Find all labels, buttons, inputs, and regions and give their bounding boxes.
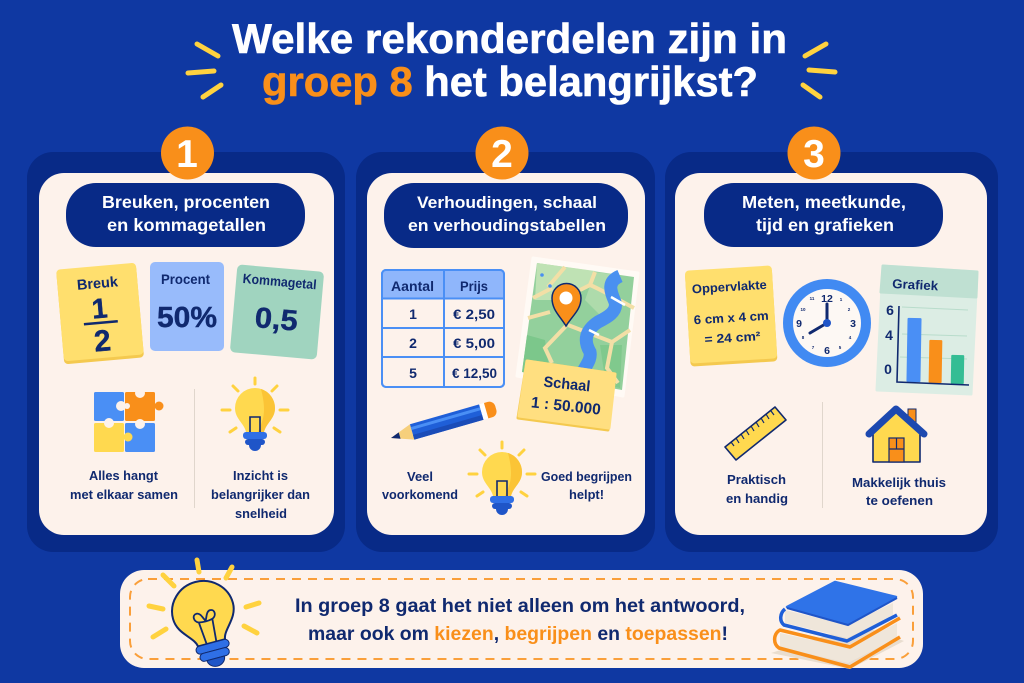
- table: € 2,50: [453, 306, 495, 322]
- card: oppervlakte: [685, 265, 777, 367]
- title: [232, 15, 787, 105]
- icon: bulb: [222, 378, 288, 451]
- badge 2: [476, 126, 528, 180]
- icon: clock: 12: [821, 293, 833, 305]
- heading 1: Breuken, procenten: [102, 192, 270, 212]
- card: breuk: 1: [90, 292, 109, 325]
- icon: clock: 3: [850, 318, 856, 330]
- heading 1: [66, 183, 305, 247]
- text: veel voorkomend: voorkomend: [382, 488, 458, 502]
- chart: grafiek: 6: [886, 302, 894, 318]
- icon: clock: 6: [824, 345, 830, 357]
- table: 2: [409, 335, 417, 351]
- table: Prijs: [460, 279, 488, 294]
- heading 2: [384, 183, 628, 248]
- heading 3: tijd en grafieken: [756, 215, 894, 235]
- chart: grafiek: [877, 266, 977, 394]
- icon: clock: 2: [848, 307, 851, 312]
- text: goed begrijpen: [541, 470, 632, 502]
- icon: ruler: [725, 407, 786, 460]
- text: thuis oefenen: [852, 476, 946, 508]
- icon: large bulb: [149, 560, 259, 674]
- card: procent: [150, 262, 224, 351]
- icon: pencil: [389, 400, 498, 446]
- badge 1: [161, 126, 214, 180]
- heading 3: Meten, meetkunde,: [742, 192, 906, 212]
- label: schaal: [518, 361, 615, 430]
- panel 1 frame: [27, 152, 345, 552]
- text: callout message: [295, 596, 745, 645]
- text: praktisch: en handig: [726, 492, 788, 506]
- card: breuk: 2: [93, 324, 112, 359]
- table: [382, 270, 504, 387]
- icon: house: [869, 409, 924, 462]
- panel 1 card: [39, 173, 334, 535]
- text: inzicht: [211, 469, 310, 521]
- card: kommagetal: Kommagetal: [242, 271, 317, 292]
- title: groep 8 het belangrijkst?: [262, 58, 758, 105]
- card: procent: Procent: [161, 271, 210, 287]
- text: alles hangt: [70, 469, 178, 502]
- icon: clock: [783, 279, 871, 367]
- text: praktisch: Praktisch: [727, 473, 786, 487]
- text: praktisch: [726, 473, 788, 506]
- card: oppervlakte: 6 cm x 4 cm: [693, 309, 769, 327]
- card: breuk: [56, 263, 144, 364]
- text: veel voorkomend: [382, 470, 458, 502]
- text: callout message: In groep 8 gaat het niet alleen om het antwoord,: [295, 596, 745, 617]
- icon: title rays left: [188, 44, 221, 97]
- heading 3: [704, 183, 943, 247]
- panel 1: breuken: [27, 126, 345, 552]
- icon: clock: 8: [802, 335, 805, 340]
- card: kommagetal: [230, 264, 324, 360]
- table: € 12,50: [452, 365, 497, 381]
- heading 2: en verhoudingstabellen: [408, 216, 606, 235]
- panel 3 frame: [665, 152, 998, 552]
- card: breuk: Breuk: [76, 274, 120, 294]
- icon: clock: 5: [839, 345, 842, 350]
- text: thuis oefenen: Makkelijk thuis: [852, 476, 946, 490]
- table: Aantal: [391, 279, 434, 294]
- text: goed begrijpen: Goed begrijpen: [541, 470, 632, 484]
- text: callout message: maar ook om kiezen, begrijpen en toepassen!: [308, 624, 728, 645]
- icon: clock: 11: [810, 296, 815, 301]
- badge 3: 3: [803, 133, 825, 176]
- badge 1: 1: [176, 133, 198, 176]
- icon: clock: 10: [800, 307, 806, 312]
- table: 1: [409, 306, 417, 322]
- card: oppervlakte: = 24 cm²: [704, 329, 761, 347]
- icon: bulb: [469, 442, 535, 515]
- chart: grafiek: Grafiek: [892, 276, 939, 293]
- panel 2 card: [367, 173, 645, 535]
- chart: grafiek: 4: [885, 327, 893, 343]
- icon: clock: 1: [840, 297, 843, 302]
- icon: clock: 9: [796, 318, 802, 330]
- text: alles hangt: Alles hangt: [89, 469, 159, 483]
- text: veel voorkomend: Veel: [407, 470, 433, 484]
- icon: clock: 4: [849, 335, 852, 340]
- heading 2: Verhoudingen, schaal: [417, 193, 597, 212]
- panel 2: verhoudingen: [356, 126, 655, 552]
- icon: map pin: [552, 284, 581, 326]
- table: € 5,00: [453, 335, 495, 351]
- text: thuis oefenen: te oefenen: [866, 494, 933, 508]
- title: Welke rekonderdelen zijn in: [232, 15, 787, 62]
- text: alles hangt: met elkaar samen: [70, 488, 178, 502]
- panel 3 card: [675, 173, 987, 535]
- card: kommagetal: 0,5: [253, 302, 299, 338]
- text: inzicht: snelheid: [235, 507, 287, 521]
- icon: clock: 7: [812, 345, 815, 350]
- text: goed begrijpen: helpt!: [569, 488, 604, 502]
- icon: title rays right: [803, 44, 835, 97]
- callout: [120, 560, 923, 674]
- icon: puzzle: [94, 388, 164, 452]
- table: 5: [409, 365, 417, 381]
- panel 3: meten: [665, 126, 998, 552]
- icon: books: [771, 582, 904, 669]
- heading 1: en kommagetallen: [107, 215, 266, 235]
- chart: grafiek: 0: [884, 361, 892, 377]
- card: procent: 50%: [157, 302, 217, 334]
- callout card: [120, 570, 923, 668]
- label: schaal: Schaal: [543, 374, 591, 395]
- card: oppervlakte: Oppervlakte: [691, 278, 767, 296]
- badge 2: 2: [491, 133, 513, 176]
- text: inzicht: Inzicht is: [233, 469, 288, 483]
- badge 3: [788, 126, 840, 180]
- label: schaal: 1 : 50.000: [530, 394, 602, 419]
- map: [517, 258, 638, 396]
- text: inzicht: belangrijker dan: [211, 488, 310, 502]
- panel 2 frame: [356, 152, 655, 552]
